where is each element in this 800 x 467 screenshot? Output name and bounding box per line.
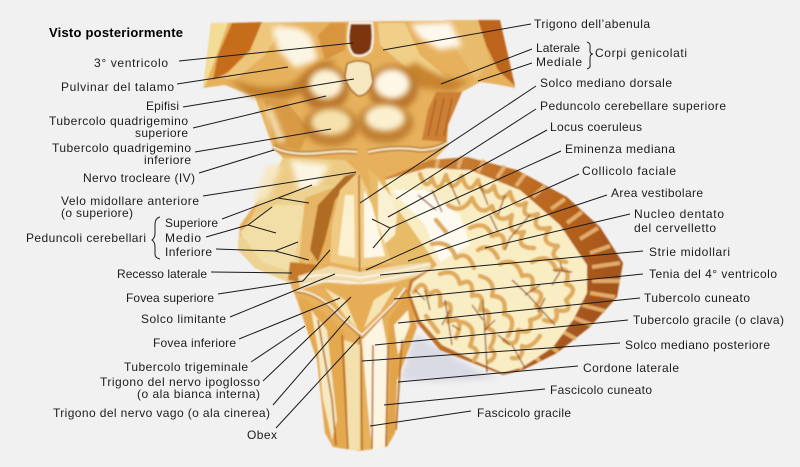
- label: Inferiore: [165, 242, 309, 260]
- label: Tubercolo quadrigemino superiore: Tubercolo quadrigemino: [49, 114, 188, 128]
- label: Area vestibolare: [408, 186, 703, 261]
- label: Trigono dell'abenula: [383, 17, 650, 50]
- label: Nervo trocleare: Nervo trocleare (IV): [83, 171, 195, 185]
- label: Solco limitante: Solco limitante: [141, 312, 226, 326]
- label: Fovea inferiore: Fovea inferiore: [153, 336, 236, 350]
- third ventricle: [348, 23, 373, 56]
- label: Fascicolo gracile: Fascicolo gracile: [477, 406, 571, 420]
- label: Mediale: [478, 55, 582, 81]
- label: Locus coeruleus: [388, 120, 642, 217]
- label: Nucleo dentato del cervelletto: Nucleo dentato: [634, 207, 724, 221]
- label: Superiore: Superiore: [165, 216, 218, 230]
- label: Tubercolo cuneato: [398, 291, 750, 323]
- label: Fovea superiore: [126, 250, 330, 305]
- label: Trigono dell'abenula: Trigono dell’abenula: [534, 17, 650, 31]
- cerebellar folia: [414, 174, 573, 362]
- label: Inferiore: Inferiore: [165, 245, 212, 259]
- label: Solco mediano dorsale: [360, 76, 672, 203]
- label: Trigono del nervo ipoglosso: (o ala bianca interna): [137, 387, 260, 401]
- cerebellum rim: [385, 157, 623, 375]
- label: Fascicolo gracile: [370, 406, 571, 426]
- label: Pulvinar del talamo: Pulvinar del talamo: [61, 80, 174, 94]
- label: Locus coeruleus: Locus coeruleus: [550, 120, 642, 134]
- label: Cordone laterale: [398, 361, 679, 382]
- label: Peduncolo cerebellare superiore: [396, 99, 726, 199]
- label: Velo midollare anteriore: [61, 172, 356, 220]
- label: Tubercolo quadrigemino inferiore: Tubercolo quadrigemino: [52, 141, 191, 155]
- label: Nervo trocleare: [83, 150, 274, 185]
- cerebellum cut face: [385, 168, 587, 373]
- label: Velo midollare anteriore: Velo midollare anteriore: [61, 194, 199, 208]
- label: Solco limitante: [141, 274, 335, 326]
- label: Fovea superiore: Fovea superiore: [126, 291, 214, 305]
- label: 3° ventricolo: 3° ventricolo: [94, 56, 168, 70]
- label: Obex: Obex: [247, 428, 277, 442]
- label: Laterale: Laterale: [536, 41, 580, 55]
- label: Peduncoli cerebellari: Peduncoli cerebellari: [26, 231, 146, 245]
- label: Trigono del nervo ipoglosso: Trigono del nervo ipoglosso: [100, 375, 260, 389]
- label: Solco mediano dorsale: Solco mediano dorsale: [540, 76, 672, 90]
- label: Pulvinar del talamo: [61, 67, 288, 94]
- label: Superiore: [165, 185, 312, 230]
- label: Cordone laterale: Cordone laterale: [583, 361, 679, 375]
- label: Tubercolo quadrigemino superiore: superiore: [135, 126, 188, 140]
- label: Tenia del 4° ventricolo: Tenia del 4° ventricolo: [649, 267, 777, 281]
- label: Tubercolo quadrigemino inferiore: [52, 129, 331, 167]
- cerebellar peduncles: [238, 158, 430, 283]
- label: Tubercolo gracile: [375, 313, 784, 345]
- label: Fovea inferiore: [153, 298, 340, 350]
- label: Trigono del nervo vago: Trigono del nervo vago (o ala cinerea): [53, 406, 270, 420]
- label: Nucleo dentato del cervelletto: del cervelletto: [634, 221, 716, 235]
- label: Mediale: Mediale: [536, 55, 582, 69]
- label: Trigono del nervo vago: [53, 316, 350, 420]
- label: Fascicolo cuneato: Fascicolo cuneato: [550, 383, 652, 397]
- medulla columns: [298, 292, 417, 450]
- label: Tenia del 4° ventricolo: [394, 267, 777, 299]
- label: Peduncolo cerebellare superiore: Peduncolo cerebellare superiore: [540, 99, 726, 113]
- cerebellum rim stripes: [436, 156, 620, 369]
- label: Nucleo dentato del cervelletto: [485, 207, 724, 248]
- trochlear nerve band: [273, 143, 447, 154]
- label: Recesso laterale: Recesso laterale: [117, 267, 207, 281]
- label: Solco mediano posteriore: Solco mediano posteriore: [625, 338, 770, 352]
- label: Corpi genicolati: Corpi genicolati: [595, 46, 687, 60]
- label: Collicolo faciale: Collicolo faciale: [582, 164, 676, 178]
- label: Epifisi: Epifisi: [146, 99, 179, 113]
- shadow under cerebellum: [400, 335, 500, 382]
- label: Velo midollare anteriore: (o superiore): [61, 206, 133, 220]
- label: Collicolo faciale: [366, 164, 676, 270]
- label: Tubercolo trigeminale: [124, 326, 305, 374]
- label: Solco mediano posteriore: [362, 338, 770, 361]
- fourth ventricle floor: [296, 172, 432, 345]
- label: Tubercolo quadrigemino superiore: [49, 96, 326, 140]
- label: Peduncoli cerebellari: [26, 217, 160, 259]
- label: Tubercolo trigeminale: Tubercolo trigeminale: [124, 360, 248, 374]
- label: Strie midollari: Strie midollari: [649, 245, 730, 259]
- label: Corpi genicolati: [587, 42, 687, 69]
- label: Tubercolo gracile: Tubercolo gracile (o clava): [633, 313, 784, 327]
- label: Tubercolo cuneato: Tubercolo cuneato: [644, 291, 750, 305]
- cerebellar white matter: [415, 183, 572, 372]
- midbrain and thalamus: [203, 20, 515, 451]
- label: Eminenza mediana: Eminenza mediana: [565, 142, 675, 156]
- label: Epifisi: [146, 79, 354, 113]
- label: Obex: [247, 337, 360, 442]
- colliculi: [301, 61, 418, 150]
- label: Strie midollari: [380, 245, 730, 275]
- pale medullary centre: [392, 190, 470, 262]
- brainstem and cerebellum illustration: [203, 20, 623, 451]
- label: Eminenza mediana: [372, 142, 675, 248]
- label: Fascicolo cuneato: [384, 383, 652, 405]
- label: 3° ventricolo: [94, 43, 353, 70]
- label: Trigono del nervo ipoglosso: [100, 297, 351, 401]
- label: Laterale: [441, 41, 580, 84]
- label: Area vestibolare: Area vestibolare: [611, 186, 703, 200]
- title: Visto posteriormente: [49, 25, 183, 40]
- label: Tubercolo quadrigemino inferiore: inferiore: [144, 153, 191, 167]
- label: Medio: [165, 207, 276, 245]
- label: Medio: Medio: [165, 231, 201, 245]
